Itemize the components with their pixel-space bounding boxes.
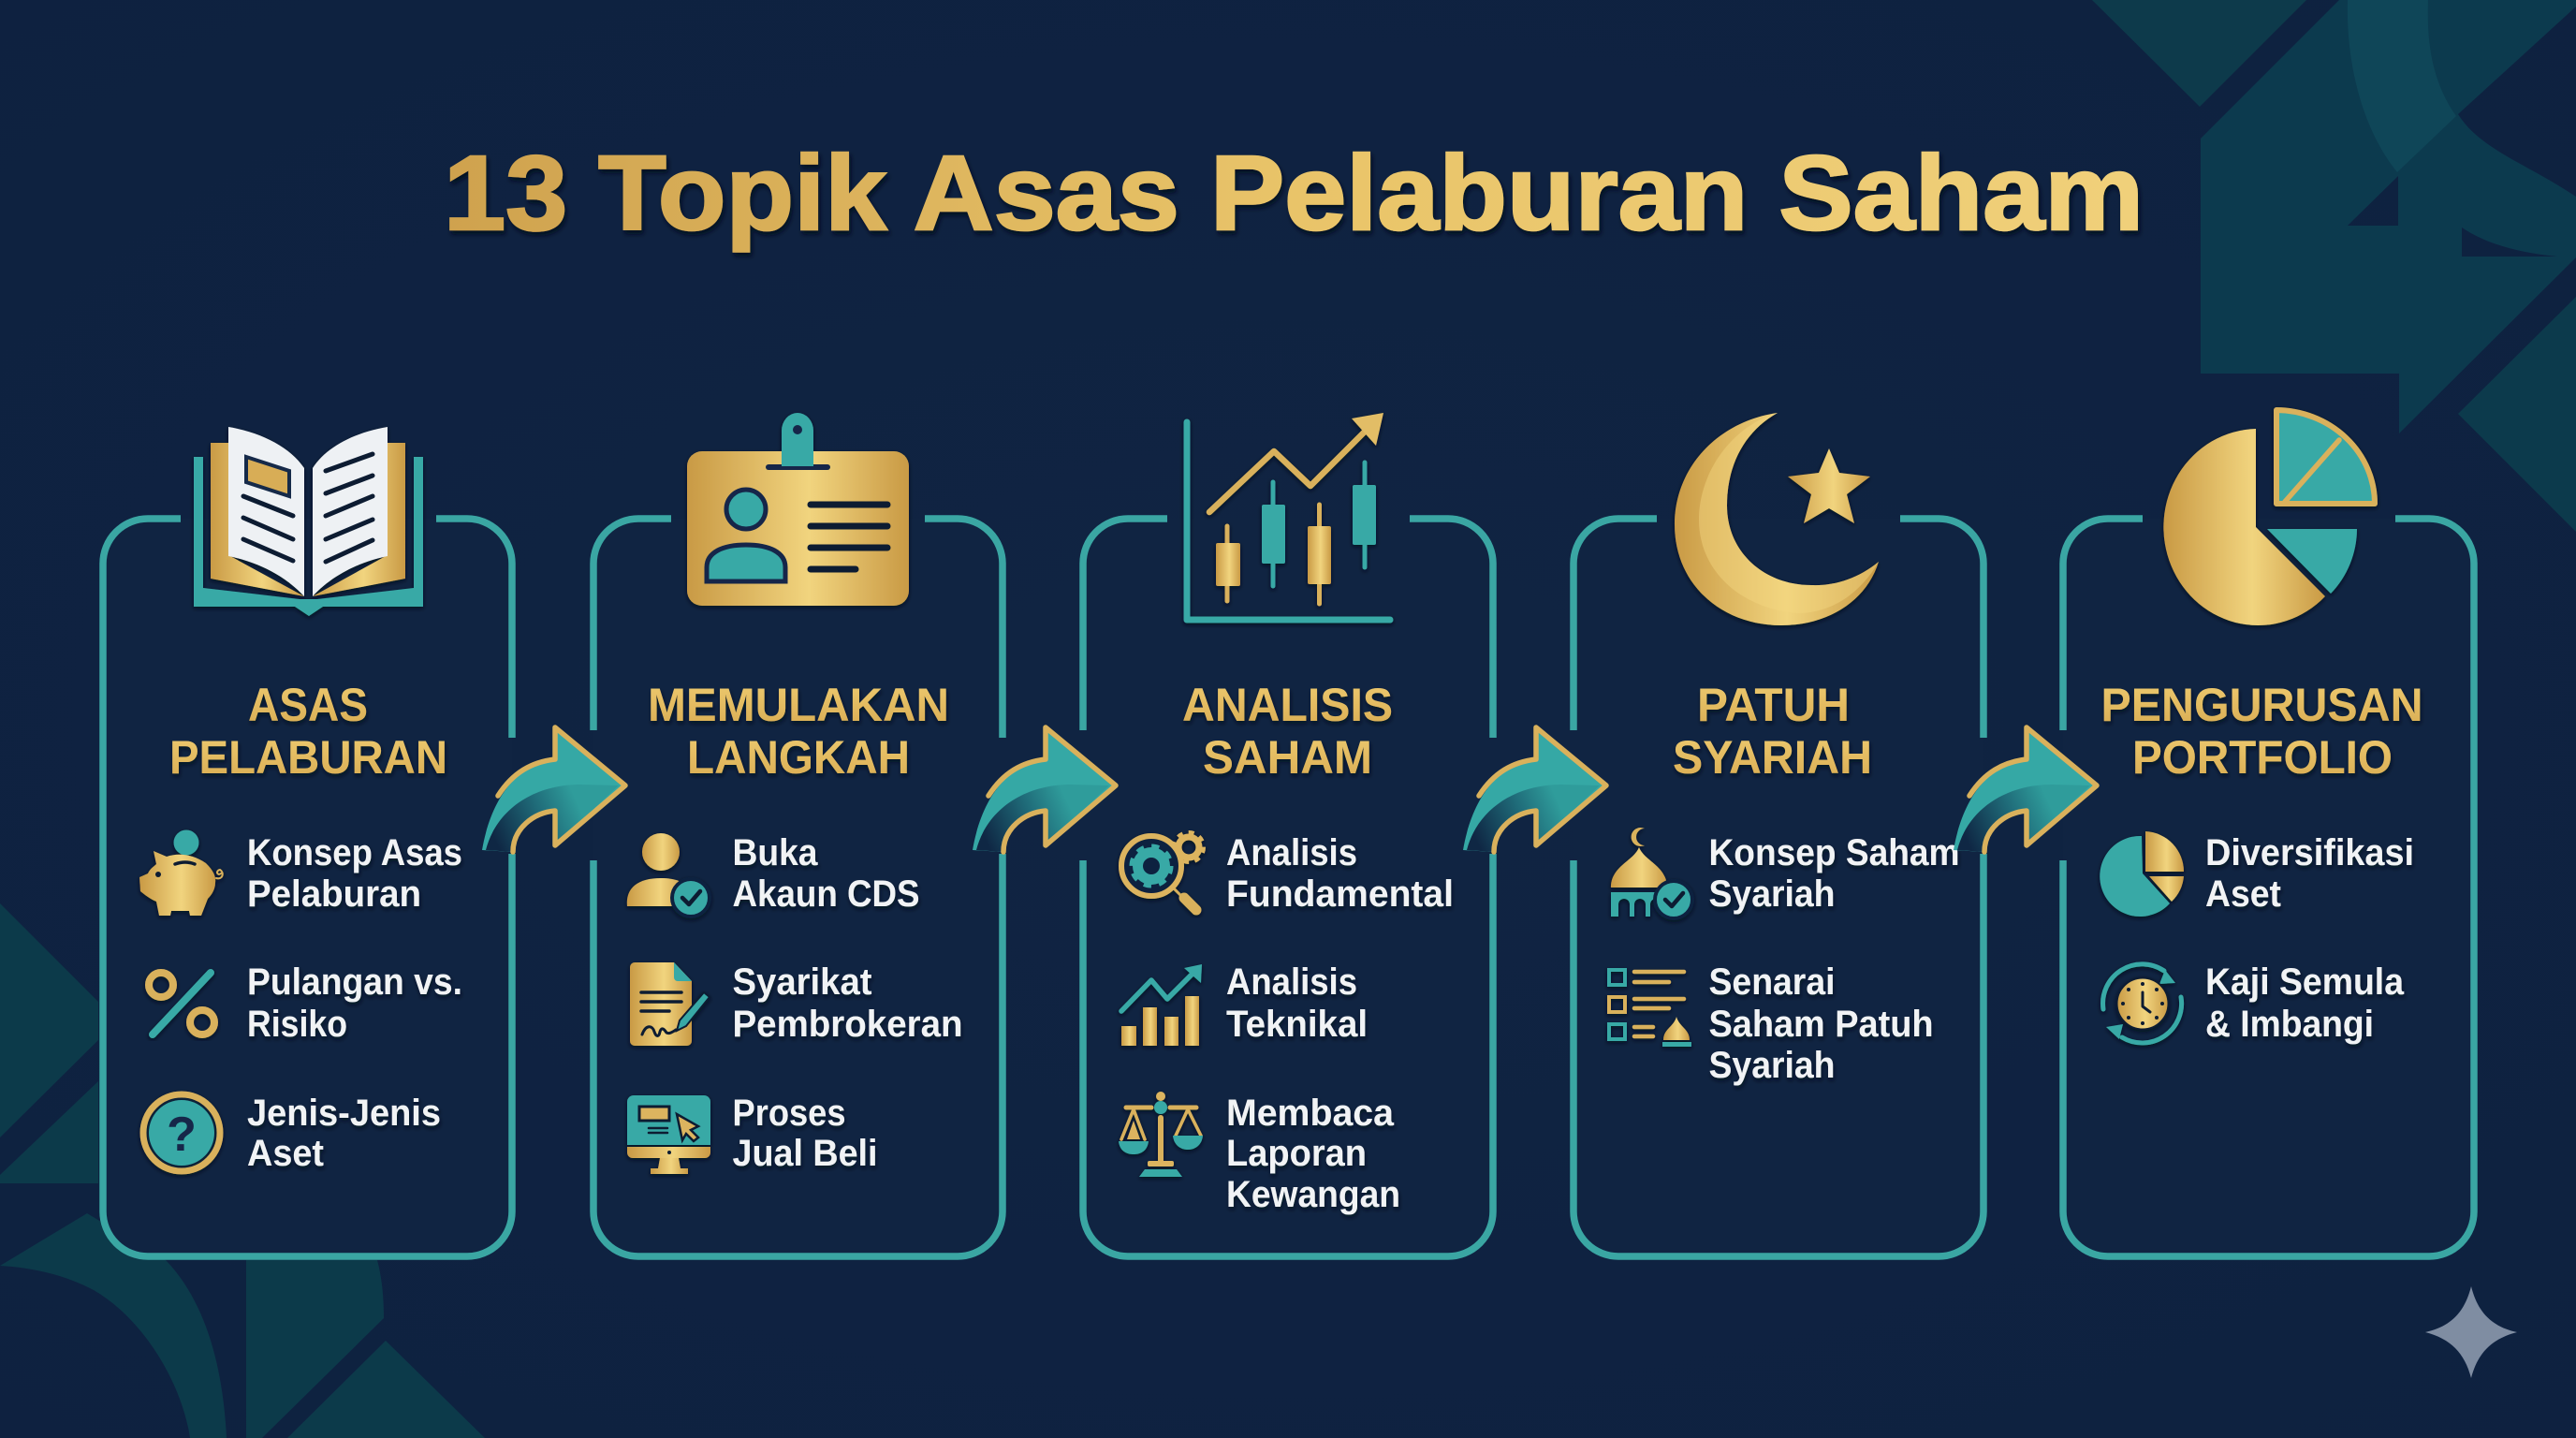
icon: ID card <box>687 413 909 606</box>
icon: monitor <box>627 1095 710 1174</box>
arrow 4 <box>1954 727 2097 852</box>
text: Syarikat <box>732 961 872 1003</box>
text: Saham Patuh <box>1709 1004 1934 1045</box>
text <box>2205 961 2405 1045</box>
text: Senarai <box>1709 961 1835 1003</box>
text: Konsep Asas <box>247 832 462 873</box>
text <box>1226 961 1368 1045</box>
heading: PATUH <box>1697 679 1850 731</box>
text: Pelaburan <box>247 873 421 915</box>
text <box>1226 1093 1400 1215</box>
icon: magnifier with gears <box>1121 832 1204 910</box>
text: Buka <box>732 832 818 873</box>
text: Laporan <box>1226 1133 1367 1174</box>
icon: document and pen <box>630 962 710 1046</box>
text <box>247 1093 441 1174</box>
text <box>1709 832 1960 915</box>
text <box>247 832 462 915</box>
heading: SYARIAH <box>1673 731 1872 784</box>
background pattern: top right geometry <box>2092 0 2576 532</box>
icon: sparkle watermark <box>2425 1286 2517 1378</box>
heading: PORTFOLIO <box>2132 731 2393 784</box>
text: Akaun CDS <box>732 873 919 915</box>
text: Jual Beli <box>732 1133 878 1174</box>
text: Analisis <box>1226 832 1357 873</box>
arrow 3 <box>1463 727 1606 852</box>
text: Diversifikasi <box>2205 832 2414 873</box>
panel: Pengurusan Portfolio <box>2063 410 2474 1256</box>
text: Aset <box>247 1133 324 1174</box>
text <box>732 1093 878 1174</box>
text: Pembrokeran <box>732 1004 962 1045</box>
text <box>1709 961 1934 1086</box>
icon: small pie <box>2100 831 2184 917</box>
background pattern: bottom left geometry <box>0 903 485 1438</box>
panel: Memulakan Langkah <box>593 413 1003 1256</box>
text: Kewangan <box>1226 1174 1400 1215</box>
text: & Imbangi <box>2205 1004 2374 1045</box>
arrow 2 <box>973 727 1116 852</box>
icon: balance scales <box>1119 1092 1203 1177</box>
icon: crescent and star <box>1675 413 1879 625</box>
text: Kaji Semula <box>2205 961 2405 1003</box>
title: 13 Topik Asas Pelaburan Saham <box>444 134 2144 252</box>
text: Jenis-Jenis <box>247 1093 441 1134</box>
text: Membaca <box>1226 1093 1395 1134</box>
icon: candlestick chart <box>1187 413 1390 620</box>
heading <box>169 679 447 784</box>
heading <box>1673 679 1872 784</box>
icon: checklist with mosque <box>1609 970 1691 1047</box>
panel: Patuh Syariah <box>1573 413 1983 1256</box>
icon: clock with cycle arrows <box>2103 964 2182 1043</box>
icon: percent <box>149 973 214 1034</box>
text: Pulangan vs. <box>247 961 462 1003</box>
icon: question mark <box>143 1094 220 1171</box>
heading: SAHAM <box>1203 731 1372 784</box>
heading: PELABURAN <box>169 731 447 784</box>
text: Konsep Saham <box>1709 832 1960 873</box>
heading <box>648 679 949 784</box>
heading: PENGURUSAN <box>2100 679 2422 731</box>
text <box>247 961 462 1045</box>
icon: pie chart <box>2163 410 2375 625</box>
heading <box>1182 679 1393 784</box>
panel: Analisis Saham <box>1083 413 1493 1256</box>
icon: mosque with check <box>1611 828 1692 918</box>
text: Proses <box>732 1093 846 1134</box>
text: Analisis <box>1226 961 1357 1003</box>
text <box>1226 832 1454 915</box>
heading: LANGKAH <box>687 731 910 784</box>
text <box>2205 832 2414 915</box>
icon: piggy bank <box>139 829 223 916</box>
heading: ASAS <box>248 679 368 731</box>
heading <box>2100 679 2422 784</box>
heading: ANALISIS <box>1182 679 1393 731</box>
icon: open book <box>194 427 423 616</box>
text <box>732 961 962 1045</box>
icon: rising bars <box>1121 964 1202 1046</box>
text: Fundamental <box>1226 873 1454 915</box>
panel: Asas Pelaburan <box>103 427 512 1256</box>
text: Syariah <box>1709 873 1835 915</box>
arrow 1 <box>482 727 625 852</box>
text: Aset <box>2205 873 2281 915</box>
icon: question mark: ? <box>167 1108 197 1162</box>
text: Risiko <box>247 1004 347 1045</box>
text: Teknikal <box>1226 1004 1368 1045</box>
heading: MEMULAKAN <box>648 679 949 731</box>
text: Syariah <box>1709 1045 1835 1086</box>
icon: person with check <box>627 833 710 917</box>
text <box>732 832 919 915</box>
